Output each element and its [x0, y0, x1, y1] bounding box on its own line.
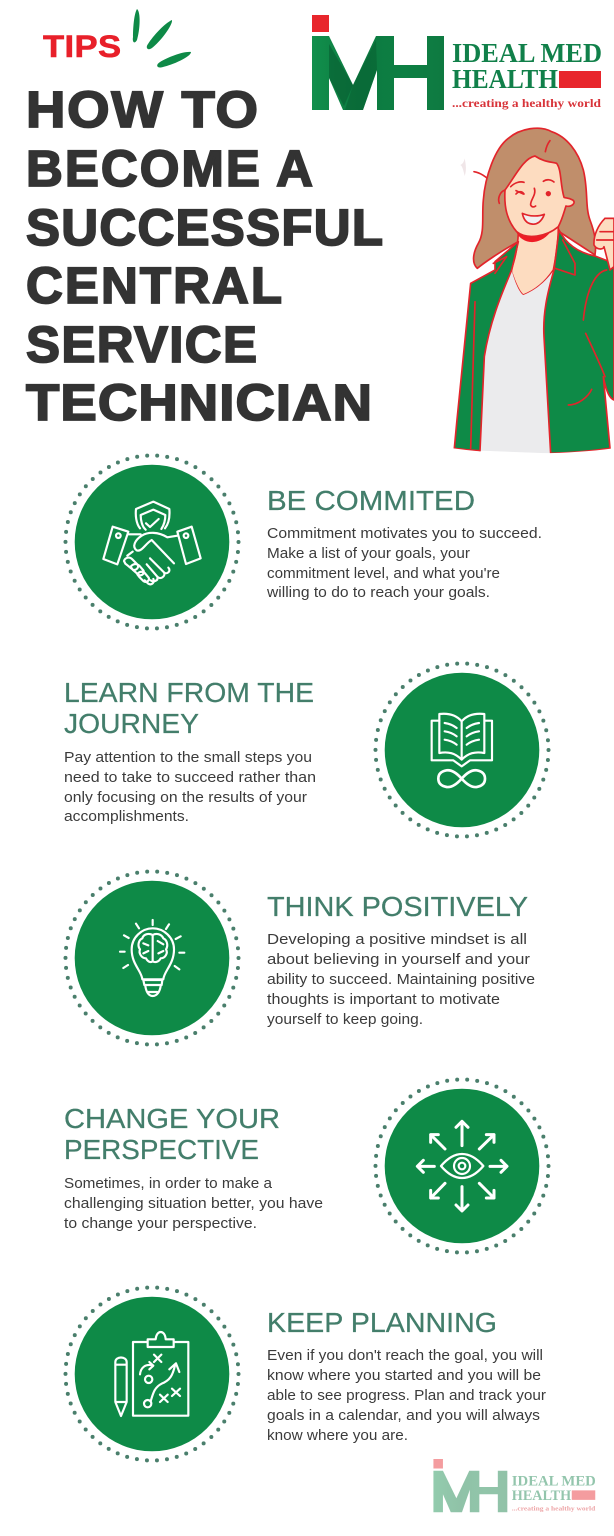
item: learn from the journey — [64, 664, 548, 836]
heading: CHANGE YOUR — [64, 1103, 280, 1134]
text block: need to take to succeed rather than — [64, 770, 316, 786]
text block — [64, 750, 316, 825]
logo: faded footer: HEALTH — [512, 1488, 571, 1504]
text block — [266, 526, 542, 601]
icon: open book with infinity — [376, 664, 548, 836]
text block: thoughts is important to motivate — [267, 992, 500, 1008]
illustration: winking woman in green jacket — [453, 128, 614, 463]
text block — [267, 1348, 546, 1444]
text block: yourself to keep going. — [267, 1012, 423, 1028]
text block: able to see progress. Plan and track your — [267, 1388, 546, 1404]
text block: Developing a positive mindset is all — [267, 932, 527, 948]
heading: THINK POSITIVELY — [267, 891, 528, 922]
text block — [267, 932, 535, 1028]
text block: ability to succeed. Maintaining positive — [267, 972, 535, 988]
title: TECHNICIAN — [26, 375, 372, 432]
text block — [64, 1176, 323, 1232]
title — [26, 82, 383, 432]
logo: faded footer: IDEAL MED — [512, 1473, 596, 1489]
icon: eye with arrows — [376, 1080, 548, 1252]
heading: KEEP PLANNING — [267, 1307, 497, 1338]
tips label — [43, 9, 191, 68]
text block: goals in a calendar, and you will always — [267, 1408, 540, 1424]
item: change your perspective — [64, 1080, 548, 1252]
item: be commited — [66, 456, 542, 628]
text block: willing to do to reach your goals. — [266, 585, 490, 601]
icon: sparks — [133, 9, 191, 68]
text block: know where you started and you will be — [267, 1368, 541, 1384]
logo: faded footer — [433, 1459, 596, 1513]
icon: clipboard plan and pencil — [66, 1288, 238, 1460]
text block: Sometimes, in order to make a — [64, 1176, 273, 1192]
text block: accomplishments. — [64, 809, 189, 825]
text block: know where you are. — [267, 1428, 408, 1444]
text block: Make a list of your goals, your — [267, 546, 470, 562]
item: think positively — [66, 872, 535, 1044]
item: keep planning — [66, 1288, 546, 1460]
text block: commitment level, and what you're — [267, 566, 500, 582]
text block: about believing in yourself and your — [267, 952, 530, 968]
text block: Pay attention to the small steps you — [64, 750, 312, 766]
heading: JOURNEY — [64, 708, 199, 739]
icon: handshake with shield — [66, 456, 238, 628]
logo: faded footer: ...creating a healthy world — [512, 1506, 596, 1513]
icon: light bulb with brain — [66, 872, 238, 1044]
tips label: TIPS — [43, 29, 121, 65]
heading: LEARN FROM THE — [64, 677, 314, 708]
logo: ideal med health: HEALTH — [452, 64, 558, 94]
title: SERVICE — [26, 316, 257, 373]
heading: BE COMMITED — [267, 485, 475, 516]
text block: only focusing on the results of your — [64, 790, 307, 806]
title: HOW TO — [26, 82, 258, 139]
logo: ideal med health — [312, 15, 602, 110]
text block: Even if you don't reach the goal, you will — [267, 1348, 543, 1364]
title: BECOME A — [26, 140, 313, 197]
heading — [64, 677, 314, 739]
title: SUCCESSFUL — [26, 199, 383, 256]
heading: PERSPECTIVE — [64, 1134, 259, 1165]
heading — [64, 1103, 280, 1165]
text block: to change your perspective. — [64, 1216, 257, 1232]
text block: challenging situation better, you have — [64, 1196, 323, 1212]
logo: ideal med health: ...creating a healthy world — [452, 96, 601, 110]
title: CENTRAL — [26, 257, 282, 314]
text block: Commitment motivates you to succeed. — [267, 526, 542, 542]
logo: ideal med health: IDEAL MED — [452, 38, 602, 68]
